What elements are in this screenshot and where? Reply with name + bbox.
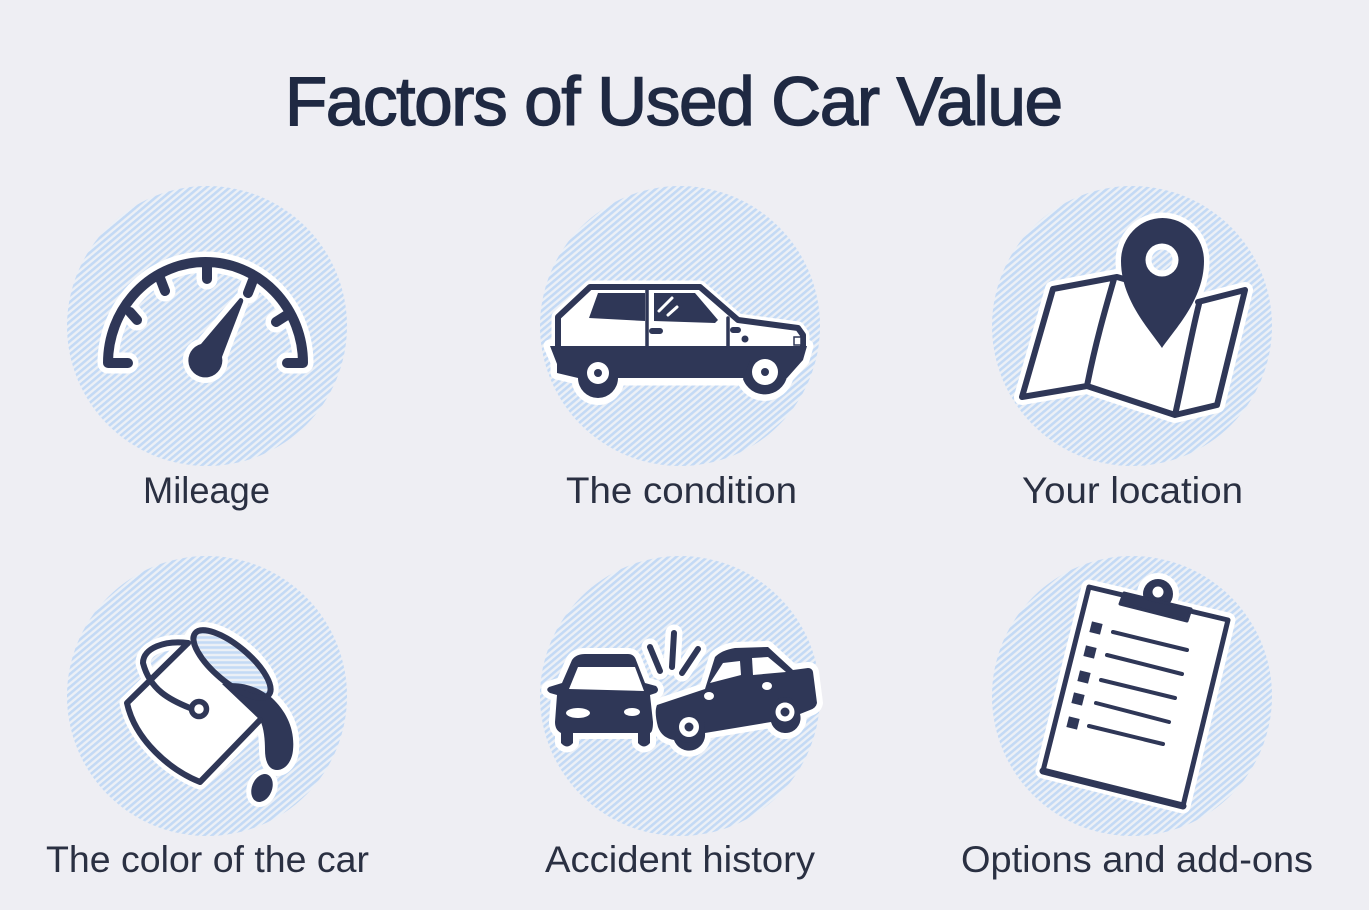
label: the condition: The condition bbox=[566, 470, 797, 511]
label: the color of the car: The color of the car bbox=[46, 839, 369, 880]
icon: paint bucket bbox=[127, 617, 293, 805]
label: mileage: Mileage bbox=[143, 470, 270, 511]
hatched circle: condition bbox=[540, 186, 820, 466]
icon: map with pin bbox=[1022, 218, 1245, 415]
panel: options and add-ons bbox=[961, 556, 1313, 880]
title: Factors of Used Car Value bbox=[285, 63, 1063, 140]
icon: clipboard checklist bbox=[1043, 579, 1228, 806]
label: options and add-ons: Options and add-ons bbox=[961, 839, 1313, 880]
panel: the color of the car bbox=[46, 556, 369, 880]
icon: speedometer bbox=[108, 262, 303, 377]
panel: your location bbox=[992, 186, 1272, 511]
icon: two car collision bbox=[547, 633, 817, 751]
hatched circle: mileage bbox=[67, 186, 347, 466]
hatched circle: location bbox=[992, 186, 1272, 466]
panel: the condition bbox=[540, 186, 820, 511]
hatched circle: accident bbox=[540, 556, 820, 836]
label: accident history: Accident history bbox=[545, 839, 816, 880]
panel: mileage bbox=[67, 186, 347, 511]
icon: car side view bbox=[550, 287, 807, 399]
panel: accident history bbox=[540, 556, 820, 880]
label: your location: Your location bbox=[1022, 470, 1243, 511]
hatched circle: options bbox=[992, 556, 1272, 836]
hatched circle: color bbox=[67, 556, 347, 836]
